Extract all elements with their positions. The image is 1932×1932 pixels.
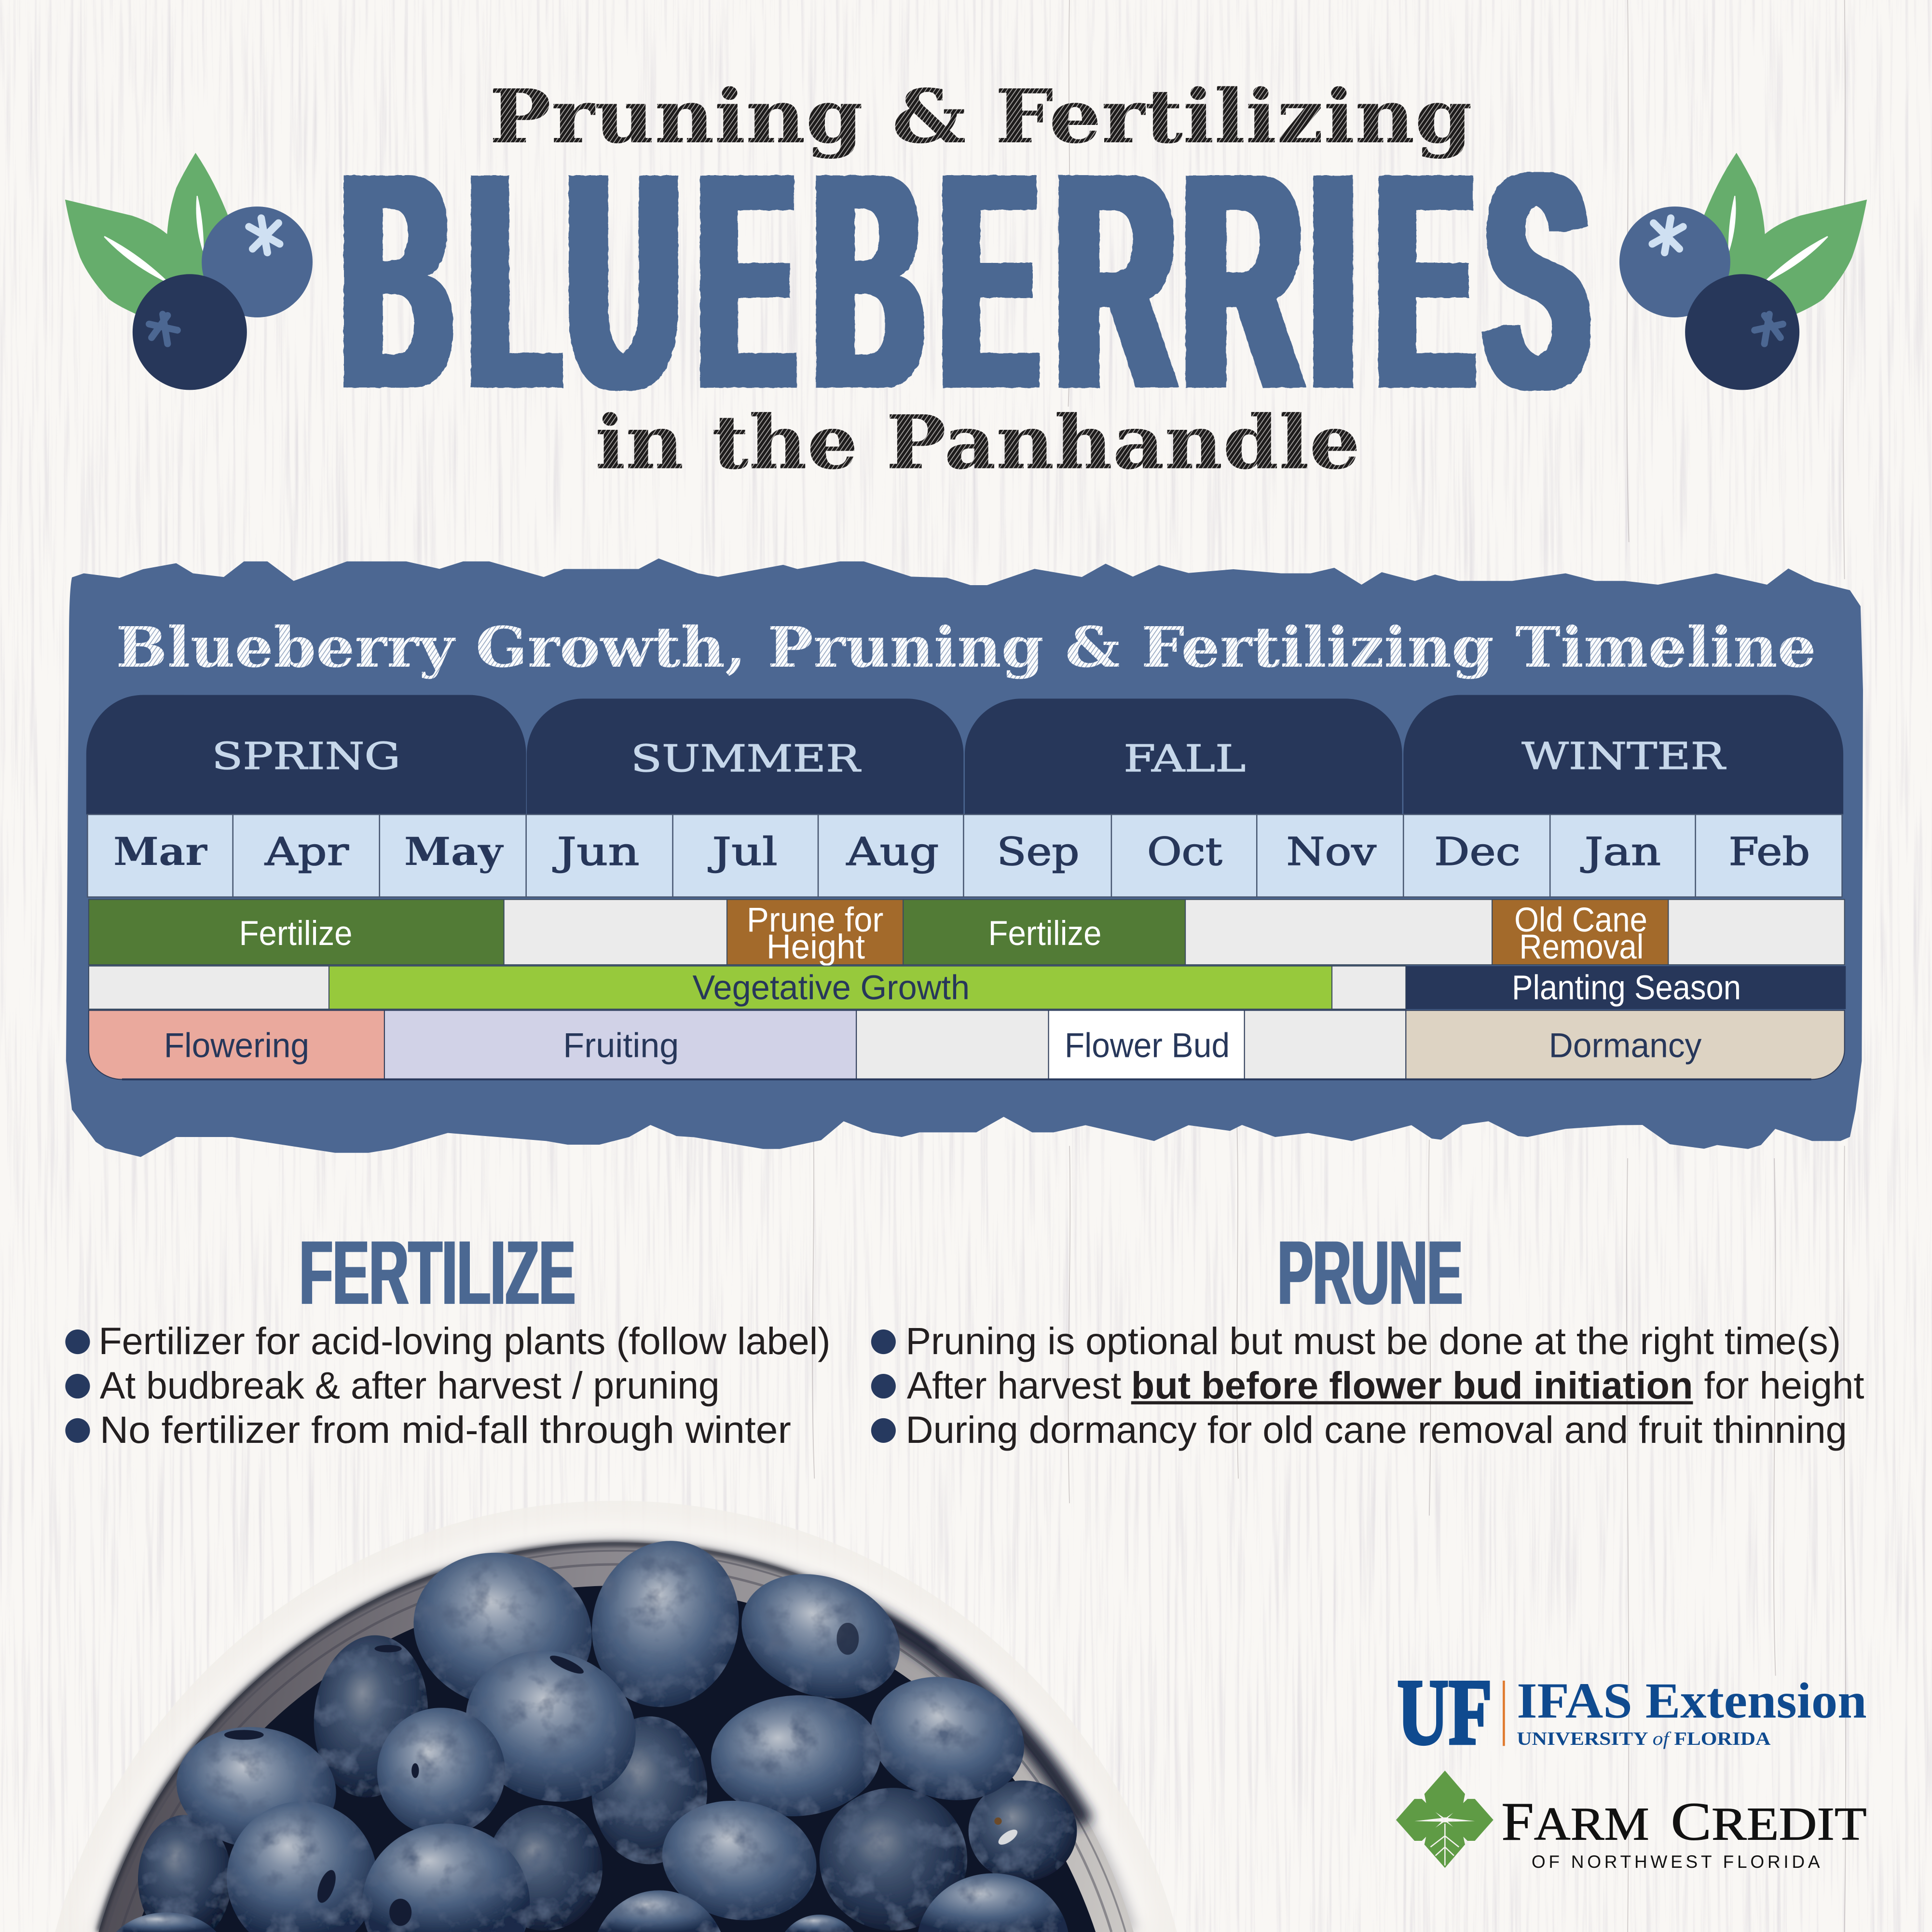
icon: left blueberries and leaves [65,153,313,390]
logo: UF IFAS Extension: IFAS Extension [1517,1673,1867,1729]
month row: Aug [846,830,939,874]
timeline row: flowering, fruiting, flower bud, dormancy: Fruiting [563,1027,679,1065]
prune bullet list: for height [1704,1364,1864,1407]
title: BLUEBERRIES: E [699,109,794,453]
prune bullet list: During dormancy for old cane removal and fruit thinning [905,1408,1847,1451]
month row: Nov [1287,830,1376,874]
title: BLUEBERRIES: B [815,110,922,453]
title: in the Panhandle: in the Panhandle [595,399,1360,486]
logo: UF IFAS Extension: UNIVERSITY of FLORIDA [1517,1728,1771,1749]
month row: Jun [553,830,640,874]
tab: summer: SUMMER [631,738,862,781]
season tabs [86,695,1843,814]
logo: Farm Credit: CREDIT [1671,1792,1867,1851]
tab: spring: SPRING [212,735,400,778]
fertilize bullet list: At budbreak & after harvest / pruning [100,1364,720,1407]
fertilize bullet list [65,1319,831,1451]
prune bullet list: Pruning is optional but must be done at the right time(s) [905,1319,1841,1362]
month row: Oct [1147,830,1222,874]
timeline row: flowering, fruiting, flower bud, dormancy: Dormancy [1549,1027,1702,1065]
timeline row: fertilize and prune [89,900,1845,966]
fertilize bullet list: No fertilizer from mid-fall through winter [100,1408,791,1451]
tab: winter [1403,695,1843,814]
timeline row: flowering, fruiting, flower bud, dormancy: Flower Bud [1065,1027,1230,1065]
heading: PRUNE: PRUNE [1278,1222,1463,1323]
timeline row: vegetative growth and planting season: Vegetative Growth [692,968,970,1007]
tab: summer [527,699,963,814]
title: Pruning & Fertilizing: Pruning & Fertilizing [489,73,1472,160]
month row: Jul [708,830,778,874]
month row: Feb [1729,830,1810,874]
prune bullet list: After harvest [907,1364,1121,1407]
timeline row: fertilize and prune: Fertilize [239,914,353,953]
prune bullet list [871,1319,1864,1451]
month row: May [404,829,504,874]
tab: fall [965,699,1402,814]
timeline row: vegetative growth and planting season [89,966,1846,1009]
timeline row: fertilize and prune: Fertilize [988,914,1101,953]
panel: timeline background [66,559,1863,1157]
title: BLUEBERRIES: R [1056,110,1174,453]
title: BLUEBERRIES: E [942,110,1037,453]
logo: Farm Credit: FARM [1501,1792,1649,1851]
timeline row: fertilize and prune: Old Cane [1514,901,1647,939]
logo: UF IFAS Extension: UF [1397,1660,1492,1764]
month row: Apr [264,830,349,874]
timeline row: fertilize and prune: Height [767,928,865,966]
panel heading: timeline title: Blueberry Growth, Pruning & Fertilizing Timeline [116,615,1816,680]
photo: bowl of blueberries [55,1501,1177,1932]
month row: Dec [1434,830,1521,874]
logo: Farm Credit [1396,1770,1867,1872]
logo: UF IFAS Extension [1397,1660,1867,1764]
tab: winter: WINTER [1521,735,1726,778]
title: BLUEBERRIES: E [1378,110,1473,453]
tab: fall: FALL [1124,738,1246,781]
timeline row: fertilize and prune: Removal [1519,928,1644,966]
month row: Sep [997,830,1079,874]
title: BLUEBERRIES [343,109,1588,453]
timeline row: vegetative growth and planting season: Planting Season [1512,968,1741,1007]
month row: Mar [113,829,207,874]
timeline row: flowering, fruiting, flower bud, dormancy: Flowering [164,1027,309,1065]
fertilize bullet list: Fertilizer for acid-loving plants (follow label) [98,1319,831,1362]
tab: spring [86,695,526,814]
icon: right blueberries and leaves [1619,153,1867,390]
timeline row: fertilize and prune: Prune for [747,901,883,939]
month row: Jan [1580,830,1661,874]
timeline row: flowering, fruiting, flower bud, dormancy [89,1010,1845,1079]
prune bullet list: but before flower bud initiation [1131,1364,1693,1407]
title: BLUEBERRIES: B [343,109,452,453]
title: BLUEBERRIES: S [1486,109,1588,453]
title: BLUEBERRIES: R [1183,110,1301,453]
heading: FERTILIZE: FERTILIZE [300,1222,575,1323]
month row [87,814,1842,897]
logo: Farm Credit: OF NORTHWEST FLORIDA [1532,1851,1820,1872]
title: BLUEBERRIES: I [1312,109,1355,453]
title: BLUEBERRIES: L [470,109,559,453]
title: BLUEBERRIES: U [568,109,679,453]
icon: Farm Credit leaf [1396,1770,1494,1868]
